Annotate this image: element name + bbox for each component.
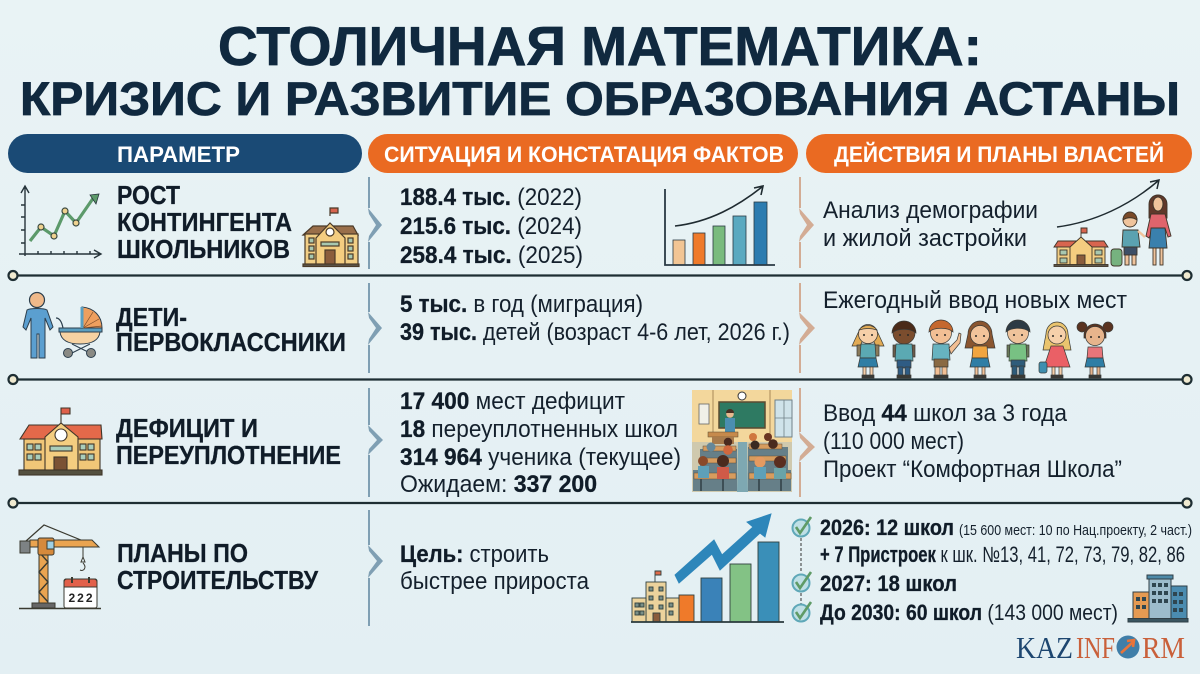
row 4 heading: СТРОИТЕЛЬСТВУ [117, 565, 319, 595]
header: действия: ДЕЙСТВИЯ И ПЛАНЫ ВЛАСТЕЙ [834, 142, 1164, 167]
row 3 action: (110 000 мест) [823, 428, 964, 455]
row 4 icon: crane and calendar: 222 [68, 591, 93, 605]
row 1 icon: school, pupil, teacher [1054, 180, 1171, 266]
plan 2026: 2026: 12 школ [820, 515, 954, 540]
row 4 goal [400, 541, 590, 595]
header: параметр [8, 134, 362, 173]
row 1 figures [400, 184, 583, 269]
header: ситуация: СИТУАЦИЯ И КОНСТАТАЦИЯ ФАКТОВ [384, 142, 784, 167]
logo: Kazinform [1016, 630, 1185, 665]
row 3 action [823, 400, 1122, 483]
logo: Kazinform: INF [1076, 630, 1115, 665]
row 2 heading [116, 302, 346, 357]
row 3 heading: ДЕФИЦИТ И [116, 413, 258, 443]
row 3 figures: Ожидаем: 337 200 [400, 471, 597, 498]
row 3 figures: 314 964 ученика (текущее) [400, 444, 681, 471]
row 4 chart: growth bars and arrow [631, 514, 784, 622]
row 1 action: Анализ демографии [823, 197, 1038, 224]
title: КРИЗИС И РАЗВИТИЕ ОБРАЗОВАНИЯ АСТАНЫ [20, 72, 1180, 125]
row 3 heading: ПЕРЕУПЛОТНЕНИЕ [116, 440, 341, 470]
title [20, 15, 1180, 125]
row 3 action: Ввод 44 школ за 3 года [823, 400, 1068, 427]
header: параметр: ПАРАМЕТР [117, 142, 240, 167]
row 1 action [823, 197, 1038, 252]
row 1 bar chart [665, 186, 775, 265]
row 1 heading: КОНТИНГЕНТА [117, 207, 292, 237]
row 3 figures: 17 400 мест дефицит [400, 388, 625, 415]
check 2030 [792, 602, 811, 622]
row 2 heading: ПЕРВОКЛАССНИКИ [116, 327, 346, 357]
row 4 timeline [792, 515, 1192, 625]
check 2026 [792, 517, 811, 536]
row 2 figures [400, 291, 790, 346]
logo: Kazinform: RM [1142, 630, 1185, 665]
row 2 heading: ДЕТИ- [116, 302, 187, 332]
row 1 heading [117, 180, 292, 264]
row 2 icons: children [852, 320, 1113, 378]
row 4 heading: ПЛАНЫ ПО [117, 538, 248, 568]
row 1 icon: line chart [19, 186, 101, 258]
row 4 heading [117, 538, 319, 595]
logo: Kazinform: KAZ [1016, 630, 1073, 665]
title: СТОЛИЧНАЯ МАТЕМАТИКА: [218, 15, 982, 77]
row 3 figures [400, 388, 681, 498]
row 4 goal: Цель: строить [400, 541, 549, 568]
plan 2027: 2027: 18 школ [820, 571, 957, 596]
row 1 action: и жилой застройки [823, 225, 1027, 252]
check 2027 [792, 572, 811, 592]
row 1 heading: РОСТ [117, 180, 180, 210]
row 1 figures: 215.6 тыс. (2024) [400, 213, 582, 240]
row 3 figures: 18 переуплотненных школ [400, 416, 678, 443]
row 3 icon: school [19, 408, 102, 475]
row 4 icon: crane and calendar [19, 525, 101, 608]
row 1 figures: 258.4 тыс. (2025) [400, 242, 583, 269]
row 3 heading [116, 413, 341, 470]
row 2 figures: 5 тыс. в год (миграция) [400, 291, 643, 318]
row 1 icon: school [303, 208, 359, 266]
row 3 illustration: classroom [692, 390, 792, 492]
row 1 figures: 188.4 тыс. (2022) [400, 184, 582, 211]
header: действия [806, 134, 1192, 173]
row 2 action: Ежегодный ввод новых мест [823, 287, 1127, 314]
row 2 icon: parent and pram [23, 292, 102, 358]
row 2 figures: 39 тыс. детей (возраст 4-6 лет, 2026 г.) [400, 319, 790, 346]
row 1 heading: ШКОЛЬНИКОВ [117, 234, 290, 264]
row 4 goal: быстрее прироста [400, 568, 590, 595]
row 4 icon: buildings [1128, 575, 1188, 622]
row 3 action: Проект “Комфортная Школа” [823, 456, 1122, 483]
header: ситуация [368, 134, 798, 173]
plan 2030: До 2030: 60 школ (143 000 мест) [820, 600, 1118, 625]
